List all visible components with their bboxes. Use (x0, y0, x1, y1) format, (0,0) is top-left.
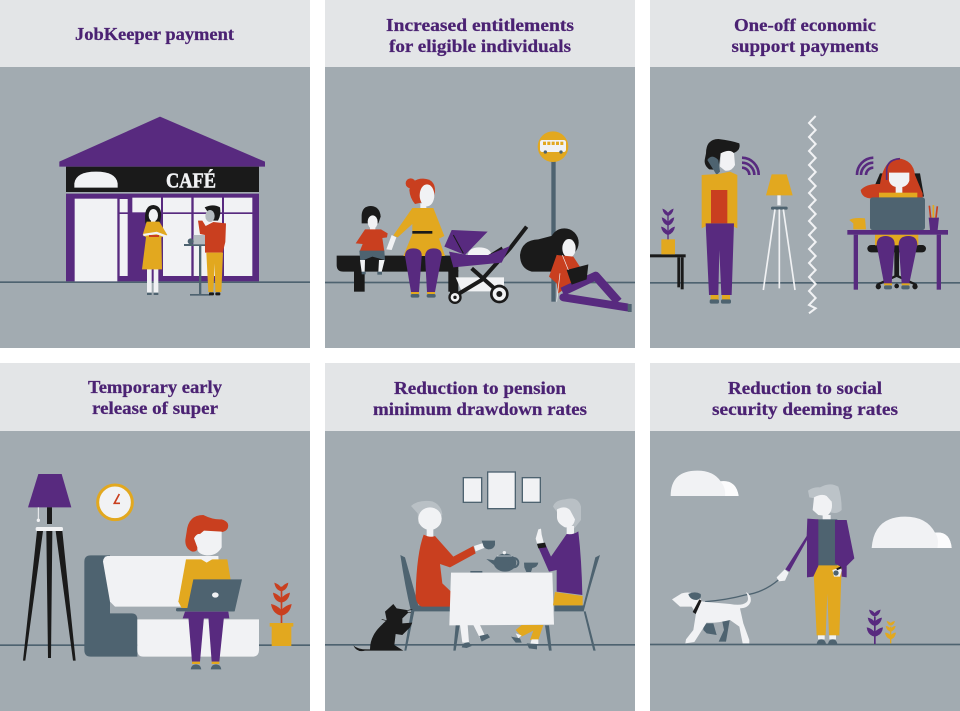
panel: One-off economic support payments (650, 0, 960, 348)
illustration: family at bus stop (325, 131, 635, 312)
café building (59, 117, 265, 281)
heading: Temporary early release of super: release of super (92, 398, 218, 418)
heading: Reduction to social security deeming rates (650, 363, 960, 431)
heading: Increased entitlements: for eligible individuals (389, 36, 571, 56)
bus stop sign (538, 131, 568, 302)
bench (337, 256, 458, 292)
small purple plant (867, 610, 883, 644)
heading: One-off economic support payments: support payments (732, 36, 878, 56)
dog (672, 592, 751, 643)
heading: Reduction to pension minimum drawdown rates: minimum drawdown rates (373, 399, 587, 419)
heading: Reduction to social security deeming rates: security deeming rates (712, 399, 898, 419)
heading: Temporary early release of super: Temporary early (88, 377, 222, 397)
man (777, 484, 854, 644)
right chair (554, 555, 600, 651)
woman in yellow dress (142, 205, 167, 295)
child (356, 206, 388, 275)
floor lamp (763, 174, 795, 290)
cloud right (872, 517, 952, 548)
heading: Temporary early release of super (0, 363, 310, 431)
sofa (84, 555, 259, 657)
teapot, cups and table (449, 551, 554, 651)
heading: Reduction to social security deeming rates: Reduction to social (728, 378, 882, 398)
heading: One-off economic support payments: One-off economic (734, 15, 876, 35)
older woman in red (411, 501, 495, 648)
signal waves, left (742, 158, 759, 175)
zigzag divider (809, 116, 816, 313)
café table with laptop (184, 235, 216, 296)
panel: Temporary early release of super (0, 363, 310, 711)
picture frames (463, 472, 540, 509)
woman at desk with headset (861, 158, 926, 289)
illustration: man walking dog (650, 471, 960, 645)
panel: Reduction to social security deeming rates (650, 363, 960, 711)
cloud left (671, 471, 739, 496)
black cat (353, 604, 412, 651)
heading: JobKeeper payment (0, 0, 310, 67)
man on phone (702, 139, 740, 304)
illustration: phone call between two people (650, 116, 960, 313)
heading: Increased entitlements (325, 0, 635, 67)
heading: JobKeeper payment: JobKeeper payment (75, 24, 234, 44)
heading: Reduction to pension minimum drawdown rates: Reduction to pension (394, 378, 566, 398)
heading: Reduction to pension minimum drawdown rates (325, 363, 635, 431)
heading: One-off economic support payments (650, 0, 960, 67)
person with laptop (176, 515, 242, 669)
panel: Increased entitlements (325, 0, 635, 348)
older man in purple (511, 499, 583, 649)
panel: Reduction to pension minimum drawdown rates (325, 363, 635, 711)
wall clock (98, 485, 132, 520)
mother (386, 178, 445, 298)
side table with plant (650, 209, 686, 289)
signal waves, right (857, 158, 873, 175)
illustration: café with two customers (0, 117, 310, 296)
illustration: couple at tea table (325, 472, 635, 651)
café building: CAFÉ (166, 169, 216, 192)
red plant in yellow pot (270, 583, 293, 646)
panel: JobKeeper payment (0, 0, 310, 348)
illustration: person with laptop on sofa (0, 474, 310, 669)
woman in red top (198, 205, 226, 295)
dog lead (705, 580, 778, 602)
left chair (400, 555, 450, 651)
girl reading (520, 228, 632, 312)
heading: Increased entitlements: Increased entitlements (386, 15, 574, 35)
small yellow plant (885, 621, 896, 643)
tripod lamp (23, 474, 76, 661)
desk with laptop, phone and pencils (847, 197, 948, 290)
pram (444, 227, 527, 304)
